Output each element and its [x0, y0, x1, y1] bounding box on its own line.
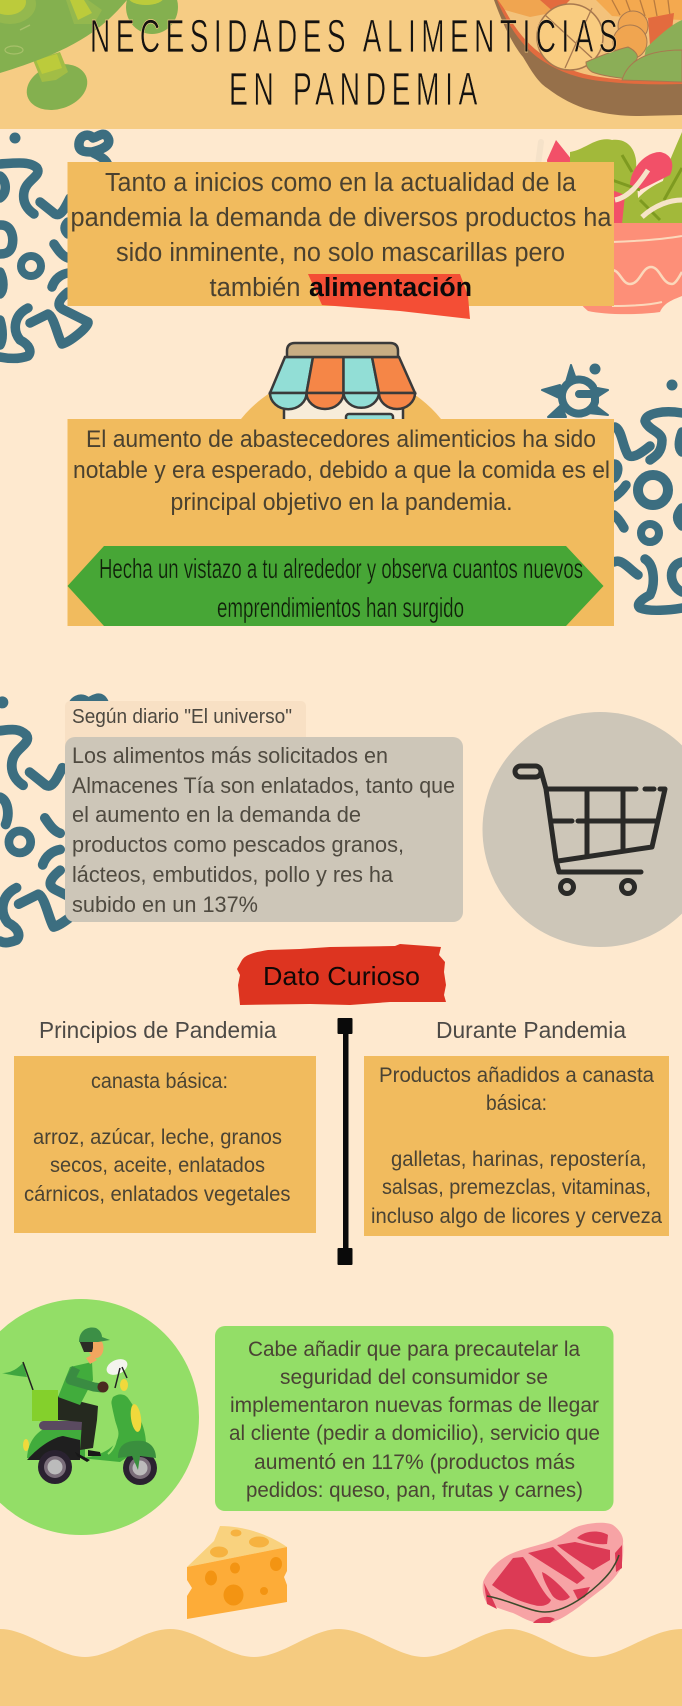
grey text card: lácteos, embutidos, pollo y res ha [72, 862, 393, 887]
intro text: pandemia la demanda de diversos productos ha [70, 204, 612, 232]
panel: delivery text [215, 1326, 614, 1511]
heading: Dato Curioso [237, 944, 446, 1005]
grey text card: Almacenes Tía son enlatados, tanto que [72, 773, 455, 798]
suppliers text: El aumento de abastecedores alimenticios ha sido [86, 426, 596, 453]
icon: food bowl illustration [494, 0, 682, 116]
panel: delivery text: pedidos: queso, pan, frutas y carnes) [246, 1478, 583, 1502]
icon: delivery scooter in circle [0, 1299, 199, 1535]
suppliers text [73, 426, 610, 516]
icon: market stall [241, 343, 441, 435]
title [90, 10, 623, 115]
decoration: virus pattern right [542, 364, 682, 610]
column heading right: Durante Pandemia [436, 1017, 626, 1043]
icon: raw steak [483, 1523, 623, 1623]
added products card [364, 1056, 669, 1236]
header band [0, 0, 682, 129]
column heading left: Principios de Pandemia [39, 1017, 277, 1043]
intro text: alimentación [309, 274, 472, 302]
panel: El universo source [65, 701, 463, 922]
grey text card: Los alimentos más solicitados en [72, 743, 388, 768]
source tab: Según diario "El universo" [72, 706, 292, 728]
grey text card: subido en un 137% [72, 892, 258, 917]
icon: salad bowl [538, 132, 682, 314]
basic basket card [14, 1056, 316, 1233]
intro text: Tanto a inicios como en la actualidad de la [105, 169, 577, 197]
panel: delivery text: seguridad del consumidor se [280, 1365, 548, 1389]
added products card: galletas, harinas, repostería, [391, 1147, 646, 1171]
intro text: también [210, 274, 300, 302]
added products card: Productos añadidos a canasta [379, 1063, 654, 1087]
intro text: sido inminente, no solo mascarillas pero [116, 239, 565, 267]
grey text card: el aumento en la demanda de [72, 802, 361, 827]
added products card: básica: [486, 1091, 547, 1115]
basic basket card: secos, aceite, enlatados [50, 1153, 265, 1177]
icon: shopping cart in circle [482, 712, 682, 947]
callout: green hexagon banner: emprendimientos han surgido [217, 592, 464, 623]
highlight brush stroke [308, 274, 470, 319]
added products card: incluso algo de licores y cerveza [371, 1204, 662, 1228]
icon: cheese wedge [187, 1526, 287, 1619]
decoration: virus pattern upper left [0, 132, 109, 358]
intro text [70, 169, 612, 302]
panel: delivery text: aumentó en 117% (productos más [254, 1450, 575, 1474]
source tab [65, 701, 306, 751]
panel: suppliers [68, 419, 614, 626]
heading: Dato Curioso: Dato Curioso [263, 961, 420, 991]
suppliers text: principal objetivo en la pandemia. [170, 489, 512, 516]
title: EN PANDEMIA [229, 63, 483, 115]
suppliers text: notable y era esperado, debido a que la comida es el [73, 457, 610, 484]
basic basket card: arroz, azúcar, leche, granos [33, 1125, 282, 1149]
grey text card [65, 737, 463, 922]
added products card: salsas, premezclas, vitaminas, [382, 1175, 651, 1199]
icon: virus illustration [0, 0, 178, 118]
decoration: virus pattern lower left [0, 696, 105, 943]
panel: intro statement [68, 162, 614, 319]
timeline divider [338, 1018, 352, 1265]
panel: durante pandemia [364, 1017, 669, 1236]
panel: principios de pandemia [14, 1017, 316, 1233]
grey text card: productos como pescados granos, [72, 832, 404, 857]
panel: delivery text: implementaron nuevas formas de llegar [230, 1393, 599, 1417]
basic basket card: cárnicos, enlatados vegetales [24, 1182, 290, 1206]
panel: delivery text: al cliente (pedir a domicilio), servicio que [229, 1421, 600, 1445]
basic basket card: canasta básica: [91, 1069, 228, 1093]
callout: green hexagon banner [68, 546, 604, 626]
footer wave band [0, 1629, 682, 1706]
panel: delivery text: Cabe añadir que para precautelar la [248, 1337, 580, 1361]
